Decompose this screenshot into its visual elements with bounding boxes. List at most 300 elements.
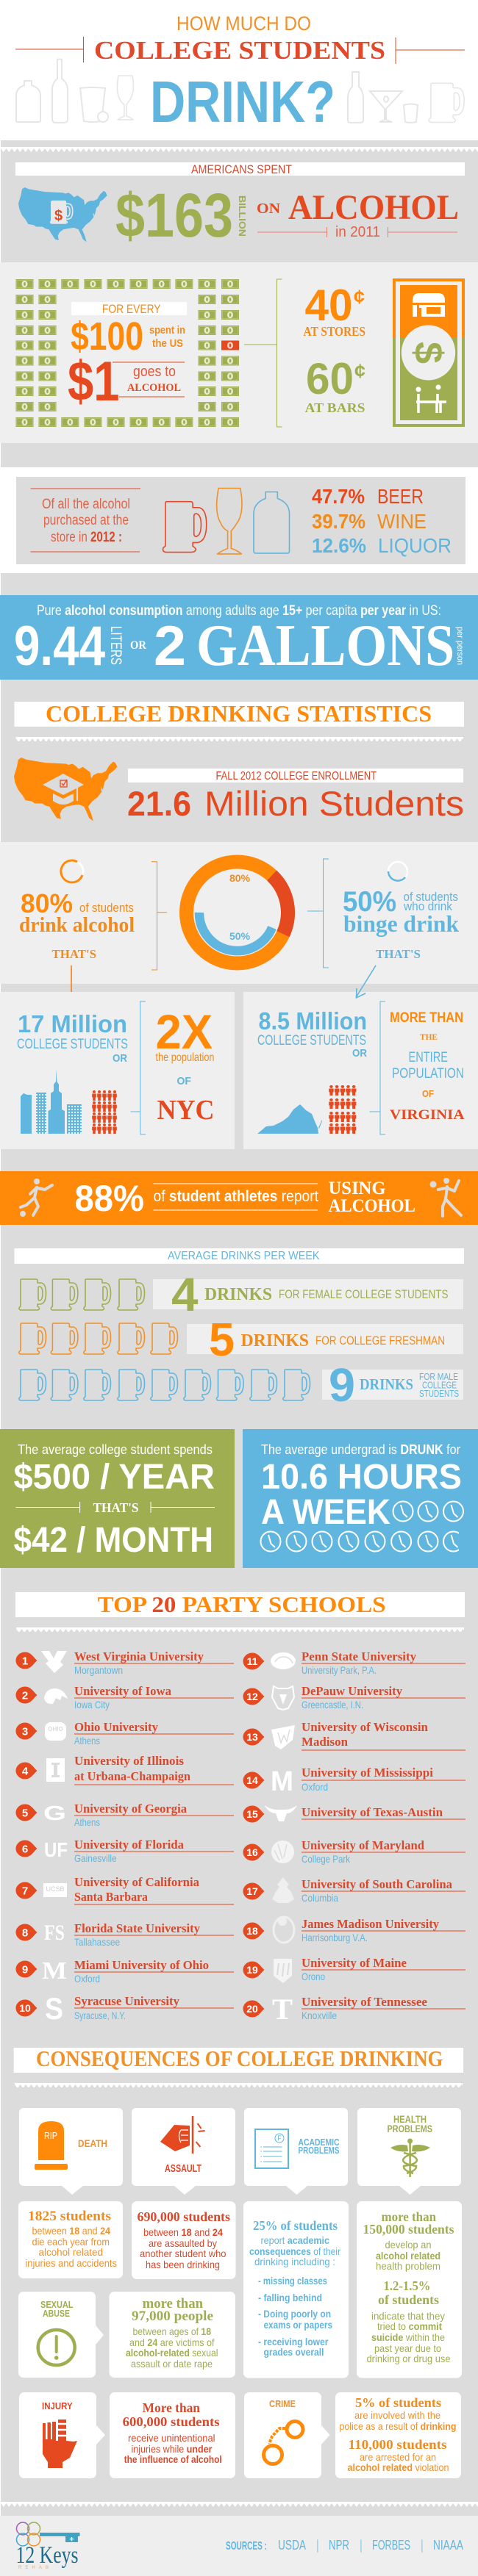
chart: 5 drinks freshmen: DRINKS <box>241 1331 309 1350</box>
heading: top 20 party schools: TOP 20 PARTY SCHOOLS <box>98 1591 385 1617</box>
card: 5% of students: 5% of students <box>355 2395 441 2410</box>
stat: $163 billion on alcohol in 2011: ON <box>257 201 281 217</box>
card: 150,000 students: of students <box>378 2292 439 2307</box>
school 5: 5 <box>22 1807 28 1819</box>
school 5: Athens <box>74 1816 100 1828</box>
card: 690,000 students: are assaulted by <box>149 2237 217 2249</box>
school 10: Syracuse University <box>74 1994 179 2008</box>
school 3: OHIO <box>48 1726 63 1733</box>
panel: 8.5 million: OR <box>352 1047 367 1059</box>
panel: 8.5 million <box>243 992 478 1149</box>
sources <box>226 2538 463 2552</box>
card: death: RIP <box>44 2130 57 2141</box>
heading: Americans spent <box>15 162 465 176</box>
stats: 40 cents at stores, 60 cents at bars: 60 <box>306 354 354 403</box>
right: 50% of students binge drink: of students <box>403 890 458 904</box>
card: sexual abuse: SEXUAL <box>40 2299 74 2310</box>
card: 25% of students: drinking including : <box>254 2256 335 2267</box>
zigzag divider <box>1 147 478 152</box>
left: 80% of students drink alcohol: drink alcohol <box>19 913 135 937</box>
panel: alcohol purchased in stores: store in 2012 : <box>51 530 122 545</box>
logo: 12 Keys Rehab: REHAB <box>18 2566 49 2570</box>
school 6: University of Florida <box>74 1838 184 1852</box>
school 17: 17 <box>246 1885 258 1897</box>
card: 25% of students: - receiving lower <box>258 2336 329 2347</box>
panel: 88% of student athletes: of student athletes report <box>153 1188 318 1205</box>
stat: fall 2012 enrollment: FALL 2012 COLLEGE ENROLLMENT <box>216 770 377 782</box>
card: assault: ASSAULT <box>165 2162 201 2175</box>
panel: alcohol purchased in stores: WINE <box>377 510 427 533</box>
panel: pure alcohol consumption: 2 <box>154 615 186 677</box>
card: crime <box>244 2392 330 2478</box>
left: 80% of students drink alcohol: THAT'S <box>51 947 96 961</box>
panel: average spend: $500 / YEAR <box>13 1458 215 1497</box>
school 7: University of California <box>74 1875 199 1889</box>
chart: 9 drinks male students: 9 <box>329 1359 355 1411</box>
card: 690,000 students: 690,000 students <box>137 2209 230 2224</box>
card: 97,000 people: more than <box>143 2296 203 2311</box>
panel: 17 million: OR <box>113 1052 127 1065</box>
card: 600,000 students: More than <box>143 2400 200 2415</box>
card: 150,000 students: past year due to <box>374 2342 441 2354</box>
school 17: Columbia <box>302 1892 338 1904</box>
card: 5% of students: alcohol related violation <box>347 2461 449 2473</box>
card: 25% of students: - missing classes <box>258 2275 327 2287</box>
left: 80% of students drink alcohol: of students <box>79 901 134 915</box>
text block: for every $100 spent $1 goes to alcohol: FOR EVERY <box>102 302 160 316</box>
school 7: UCSB <box>46 1885 65 1893</box>
text block: for every $100 spent $1 goes to alcohol: the US <box>152 337 183 350</box>
panel: drunk hours per week: A WEEK <box>261 1493 390 1532</box>
card: 25% of students: report academic <box>260 2234 329 2246</box>
panel: pure alcohol consumption: GALLONS <box>196 614 454 678</box>
sources: | <box>421 2538 424 2552</box>
school 8: 8 <box>22 1926 28 1940</box>
stat: $163 billion on alcohol in 2011: $163 <box>115 181 233 250</box>
panel: pure alcohol consumption: Pure alcohol consumption among adults age 15+ per capita per year in US: <box>37 603 441 619</box>
bracket connector <box>244 279 282 427</box>
stats: 40 cents at stores, 60 cents at bars: 40 <box>304 281 353 330</box>
panel: drunk hours per week: 10.6 HOURS <box>261 1458 462 1497</box>
panel: alcohol purchased in stores: 47.7% <box>312 485 365 508</box>
panel: 8.5 million: THE <box>420 1032 438 1042</box>
card: 25% of students: consequences of their <box>249 2245 340 2257</box>
school 6: UF <box>44 1838 68 1861</box>
right: 50% of students binge drink <box>307 859 459 968</box>
chart: 9 drinks male students: FOR MALE <box>419 1371 458 1382</box>
school 19: 19 <box>246 1964 258 1976</box>
panel: pure alcohol consumption: LITERS <box>107 626 124 665</box>
title: HOW MUCH DO <box>176 12 311 35</box>
panel: average spend <box>0 1429 235 1568</box>
chart: 5 drinks freshmen: 5 <box>209 1313 235 1366</box>
school 7 <box>16 1875 234 1904</box>
logo: 12 Keys Rehab <box>16 2522 79 2570</box>
school 4: University of Illinois <box>74 1754 184 1768</box>
card: 690,000 students: between 18 and 24 <box>143 2226 223 2238</box>
school 3 <box>16 1720 234 1746</box>
panel: 88% of student athletes: 88% <box>75 1178 144 1219</box>
stat: fall 2012 enrollment: Million Students <box>204 784 464 823</box>
school 6 <box>16 1838 234 1864</box>
title <box>15 12 465 134</box>
sources: | <box>359 2538 363 2552</box>
card: 600,000 students: receive unintentional <box>128 2432 215 2444</box>
panel: pure alcohol consumption <box>0 595 478 680</box>
panel: 8.5 million: COLLEGE STUDENTS <box>257 1033 366 1048</box>
card: 600,000 students: the influence of alcohol <box>124 2453 222 2465</box>
school 8 <box>16 1921 234 1948</box>
school 14: M <box>271 1766 293 1797</box>
card: 150,000 students: alcohol related <box>376 2250 440 2262</box>
school 18 <box>243 1917 465 1943</box>
panel: 17 million: the population <box>156 1051 215 1064</box>
card: 1825 students: die each year from <box>32 2236 110 2248</box>
grid of dollar bills <box>16 279 239 427</box>
panel: pure alcohol consumption: 9.44 <box>14 615 105 677</box>
school 19: University of Maine <box>302 1956 407 1970</box>
text block: for every $100 spent $1 goes to alcohol <box>68 302 187 413</box>
arrow: orange down <box>67 965 76 1004</box>
heading: college drinking statistics: COLLEGE DRINKING STATISTICS <box>46 700 432 727</box>
panel: 17 million: COLLEGE STUDENTS <box>17 1037 128 1052</box>
school 14: Oxford <box>302 1781 328 1793</box>
school 18: 18 <box>246 1925 258 1937</box>
school 5: University of Georgia <box>74 1802 187 1816</box>
icon: vertical dollar bill with store and bar: $ <box>406 342 450 364</box>
panel: alcohol purchased in stores: Of all the alcohol <box>42 497 130 512</box>
school 12 <box>243 1684 465 1710</box>
school 1 <box>16 1649 234 1676</box>
card: 150,000 students: suicide within the <box>371 2331 445 2343</box>
sources: NPR <box>329 2538 349 2552</box>
school 3: Ohio University <box>74 1720 158 1734</box>
chart: 4 drinks female students: DRINKS <box>204 1285 272 1304</box>
chart: 5 drinks freshmen <box>19 1313 463 1366</box>
heading: average drinks per week: AVERAGE DRINKS PER WEEK <box>168 1250 320 1262</box>
sources: FORBES <box>372 2538 410 2552</box>
panel: alcohol purchased in stores: 39.7% <box>312 510 365 533</box>
panel: average spend: $42 / MONTH <box>13 1521 213 1560</box>
school 16: 16 <box>246 1846 258 1858</box>
card: assault <box>132 2108 235 2195</box>
school 20: Knoxville <box>302 2010 337 2021</box>
card: 25% of students: - Doing poorly on <box>258 2308 331 2320</box>
school 10 <box>16 1991 234 2026</box>
school 11: University Park, P.A. <box>302 1664 377 1676</box>
card: 600,000 students <box>110 2392 235 2478</box>
card: injury: INJURY <box>42 2400 73 2411</box>
school 16: College Park <box>302 1853 351 1865</box>
card: sexual abuse <box>18 2292 104 2378</box>
panel: average spend: THAT'S <box>93 1500 138 1515</box>
chart: 9 drinks male students <box>19 1359 463 1411</box>
school 6: 6 <box>22 1843 28 1856</box>
school 16 <box>243 1838 465 1865</box>
icons: row of drink outlines <box>16 59 464 123</box>
heading: Americans spent: AMERICANS SPENT <box>191 162 292 176</box>
school 13: Madison <box>302 1735 349 1749</box>
heading: top 20 party schools <box>15 1591 465 1617</box>
card: academic problems: ACADEMIC <box>299 2137 340 2148</box>
right: 50% of students binge drink: binge drink <box>343 910 459 937</box>
school 18: James Madison University <box>302 1917 439 1931</box>
card: 150,000 students: indicate that they <box>371 2310 445 2322</box>
school 1: 1 <box>22 1655 28 1668</box>
school 4 <box>16 1754 234 1785</box>
left: 80% of students drink alcohol: 80% <box>21 888 73 918</box>
card: academic problems: F <box>277 2134 282 2142</box>
chart: 5 drinks freshmen: FOR COLLEGE FRESHMAN <box>315 1334 445 1348</box>
chart: 9 drinks male students: COLLEGE <box>422 1380 457 1390</box>
card: 25% of students <box>243 2201 349 2378</box>
card: health problems: HEALTH <box>393 2113 427 2125</box>
card: 25% of students: exams or papers <box>263 2319 332 2331</box>
panel: pure alcohol consumption: per person <box>455 627 465 665</box>
school 20: University of Tennessee <box>302 1995 427 2009</box>
school 15: 15 <box>246 1808 258 1820</box>
school 13: 13 <box>246 1731 258 1743</box>
card: 150,000 students <box>357 2201 462 2378</box>
icon: Virginia state <box>257 1104 322 1134</box>
school 19: Orono <box>302 1971 325 1982</box>
zigzag divider <box>1 2502 478 2507</box>
school 14: 14 <box>246 1774 258 1786</box>
school 2: 2 <box>22 1690 28 1702</box>
card: 5% of students: are involved with the <box>354 2409 440 2421</box>
panel: 17 million: NYC <box>157 1095 215 1126</box>
stats: 40 cents at stores, 60 cents at bars: ¢ <box>354 286 365 308</box>
school 13: University of Wisconsin <box>302 1720 429 1734</box>
panel: 17 million: OF <box>176 1075 191 1087</box>
card: 1825 students: alcohol related <box>38 2246 103 2258</box>
card: 5% of students <box>335 2392 461 2478</box>
school 10: Syracuse, N.Y. <box>74 2010 126 2021</box>
card: death: DEATH <box>78 2137 107 2149</box>
panel: 8.5 million: OF <box>422 1088 434 1099</box>
text block: for every $100 spent $1 goes to alcohol: ALCOHOL <box>127 382 181 394</box>
card: sexual abuse: ABUSE <box>43 2308 70 2319</box>
right: 50% of students binge drink: who drink <box>403 899 452 913</box>
school 3: Athens <box>74 1735 100 1746</box>
stats: 40 cents at stores, 60 cents at bars <box>303 281 365 415</box>
school 14 <box>243 1766 465 1797</box>
card: academic problems: PROBLEMS <box>299 2145 340 2156</box>
card: 600,000 students: 600,000 students <box>123 2414 219 2429</box>
panel: drunk hours per week <box>243 1429 478 1568</box>
heading: average drinks per week <box>15 1248 464 1264</box>
school 17: University of South Carolina <box>302 1877 452 1891</box>
school 8: FS <box>44 1921 65 1945</box>
school 10: 10 <box>19 2002 31 2014</box>
card: 150,000 students: more than <box>381 2209 436 2224</box>
school 10: S <box>45 1991 63 2026</box>
card: 25% of students: - falling behind <box>258 2292 322 2303</box>
school 9: 9 <box>22 1963 28 1976</box>
card: 150,000 students: tried to commit <box>377 2320 442 2332</box>
school 5: G <box>43 1802 66 1824</box>
panel: 88% of student athletes: ALCOHOL <box>328 1196 415 1216</box>
logo: 12 Keys Rehab: 12 Keys <box>16 2542 78 2569</box>
icon: red people group NYC <box>92 1090 117 1134</box>
stats: 40 cents at stores, 60 cents at bars: ¢ <box>354 360 365 382</box>
card: health problems: PROBLEMS <box>387 2123 432 2134</box>
school 12: DePauw University <box>302 1684 402 1698</box>
chart: 9 drinks male students: STUDENTS <box>419 1388 459 1399</box>
panel: 88% of student athletes <box>0 1171 478 1225</box>
card: 690,000 students: another student who <box>140 2248 226 2259</box>
panel: average spend: The average college student spends <box>18 1442 213 1457</box>
school 11: Penn State University <box>302 1649 416 1663</box>
card: 25% of students: grades overall <box>263 2346 324 2358</box>
card: 1825 students: between 18 and 24 <box>32 2225 110 2237</box>
school 2: University of Iowa <box>74 1684 171 1698</box>
card: 97,000 people <box>109 2292 235 2378</box>
school 5 <box>16 1802 234 1828</box>
school 8: Florida State University <box>74 1921 200 1935</box>
school 15: University of Texas-Austin <box>302 1805 443 1819</box>
school 1: Morgantown <box>74 1664 123 1676</box>
right: 50% of students binge drink: 50% <box>343 886 396 918</box>
school 9 <box>16 1957 234 1985</box>
card: 150,000 students: develop an <box>385 2239 431 2251</box>
stat: $163 billion on alcohol in 2011: in 2011 <box>335 224 380 240</box>
school 20: T <box>272 1993 293 2026</box>
icon: blue US map with mug: $ <box>54 208 63 224</box>
icon: blue US map with mug <box>18 187 107 242</box>
chart: 9 drinks male students: DRINKS <box>360 1375 413 1393</box>
text block: for every $100 spent $1 goes to alcohol: goes to <box>133 364 176 380</box>
card: academic problems <box>244 2108 348 2195</box>
school 17 <box>243 1877 465 1904</box>
stat: fall 2012 enrollment <box>127 769 464 823</box>
panel: alcohol purchased in stores: purchased at the <box>43 513 129 528</box>
school 7: 7 <box>22 1885 28 1897</box>
zigzag divider <box>15 2083 463 2087</box>
card: 1825 students <box>18 2201 123 2278</box>
icon: tennis player <box>429 1178 461 1216</box>
card: 150,000 students: 150,000 students <box>363 2222 454 2237</box>
card: 5% of students: are arrested for an <box>360 2451 436 2463</box>
icon: red people group Virginia <box>329 1085 356 1134</box>
school 6: Gainesville <box>74 1852 117 1864</box>
card: 97,000 people: 97,000 people <box>132 2309 213 2324</box>
chart: donut 80% and 50%: 50% <box>229 930 251 942</box>
school 7: Santa Barbara <box>74 1890 148 1904</box>
card: death <box>19 2108 123 2195</box>
card: 5% of students: 110,000 students <box>349 2437 447 2452</box>
school 2: Iowa City <box>74 1699 110 1710</box>
sources: | <box>316 2538 319 2552</box>
text block: for every $100 spent $1 goes to alcohol: spent in <box>149 324 185 337</box>
card: 1825 students: 1825 students <box>28 2209 111 2224</box>
school 15 <box>243 1805 465 1822</box>
school 12: Greencastle, I.N. <box>302 1699 363 1710</box>
chart: 4 drinks female students <box>19 1268 463 1321</box>
panel: 17 million <box>0 992 235 1149</box>
school 14: University of Mississippi <box>302 1766 433 1780</box>
card: 690,000 students: has been drinking <box>146 2259 220 2270</box>
school 11 <box>243 1649 465 1676</box>
left: 80% of students drink alcohol <box>19 860 167 970</box>
school 1: West Virginia University <box>74 1649 204 1663</box>
panel: 8.5 million: ENTIRE <box>409 1050 448 1065</box>
card: injury <box>19 2392 105 2478</box>
panel: 8.5 million: VIRGINIA <box>390 1107 465 1123</box>
arrow: blue diagonal <box>356 965 376 998</box>
chart: 4 drinks female students: 4 <box>171 1268 199 1321</box>
panel: alcohol purchased in stores: BEER <box>377 485 424 508</box>
panel: pure alcohol consumption: OR <box>130 639 146 652</box>
panel: 17 million: 2X <box>156 1004 213 1059</box>
panel: 17 million: 17 Million <box>18 1010 127 1037</box>
school 4: at Urbana-Champaign <box>74 1769 191 1783</box>
panel: alcohol purchased in stores: 12.6% <box>312 534 366 557</box>
card: 97,000 people: alcohol-related sexual <box>126 2347 218 2359</box>
school 19 <box>243 1956 465 1983</box>
card: 150,000 students: health problem <box>376 2260 440 2272</box>
school 9: Oxford <box>74 1973 100 1985</box>
school 2 <box>16 1684 234 1710</box>
school 18: Harrisonburg V.A. <box>302 1932 368 1943</box>
panel: alcohol purchased in stores: LIQUOR <box>378 534 452 557</box>
school 9: Miami University of Ohio <box>74 1958 209 1972</box>
school 3: 3 <box>22 1725 28 1738</box>
card: 5% of students: police as a result of drinking <box>340 2420 456 2432</box>
panel: 88% of student athletes: USING <box>328 1179 385 1198</box>
card: 25% of students: 25% of students <box>253 2218 338 2233</box>
card: 600,000 students: injuries while under <box>131 2443 213 2455</box>
stat: $163 billion on alcohol in 2011 <box>115 181 459 250</box>
school 9: M <box>42 1957 67 1985</box>
card: 97,000 people: between ages of 18 <box>132 2325 211 2337</box>
panel: 8.5 million: 8.5 Million <box>259 1007 367 1035</box>
stats: 40 cents at stores, 60 cents at bars: AT BARS <box>304 400 365 415</box>
school 12: 12 <box>246 1691 258 1702</box>
school 20: 20 <box>246 2003 258 2015</box>
zigzag divider <box>16 1627 464 1632</box>
card: 150,000 students: 1.2-1.5% <box>384 2278 431 2293</box>
card: 1825 students: injuries and accidents <box>25 2257 117 2269</box>
text block: for every $100 spent $1 goes to alcohol: $100 <box>71 314 143 359</box>
card: 690,000 students <box>132 2201 235 2279</box>
stat: $163 billion on alcohol in 2011: BILLION <box>237 195 248 237</box>
right: 50% of students binge drink: THAT'S <box>376 947 421 961</box>
school 16: University of Maryland <box>302 1838 425 1852</box>
stat: fall 2012 enrollment: 21.6 <box>127 784 191 823</box>
icon: NYC skyline <box>21 1069 82 1134</box>
panel: alcohol purchased in stores <box>0 467 478 573</box>
school 8: Tallahassee <box>74 1936 120 1948</box>
card: health problems <box>357 2108 461 2195</box>
school 4: 4 <box>22 1765 29 1778</box>
zigzag divider <box>16 737 463 741</box>
stats: 40 cents at stores, 60 cents at bars: AT STORES <box>303 324 365 339</box>
card: crime: CRIME <box>269 2398 296 2409</box>
panel: 8.5 million: MORE THAN <box>390 1010 463 1026</box>
panel: drunk hours per week: The average undergrad is DRUNK for <box>261 1442 460 1457</box>
sources: NIAAA <box>433 2538 463 2552</box>
card: 97,000 people: and 24 are victims of <box>129 2336 215 2348</box>
text block: for every $100 spent $1 goes to alcohol: $1 <box>68 350 119 413</box>
chart: donut 80% and 50%: 80% <box>229 872 251 884</box>
stat: $163 billion on alcohol in 2011: ALCOHOL <box>288 188 459 227</box>
sources: SOURCES : <box>226 2540 267 2552</box>
icon: orange US map with graduation cap <box>14 758 118 821</box>
school 11: 11 <box>247 1655 258 1667</box>
title: DRINK? <box>150 69 335 134</box>
icon: soccer player <box>20 1179 52 1217</box>
